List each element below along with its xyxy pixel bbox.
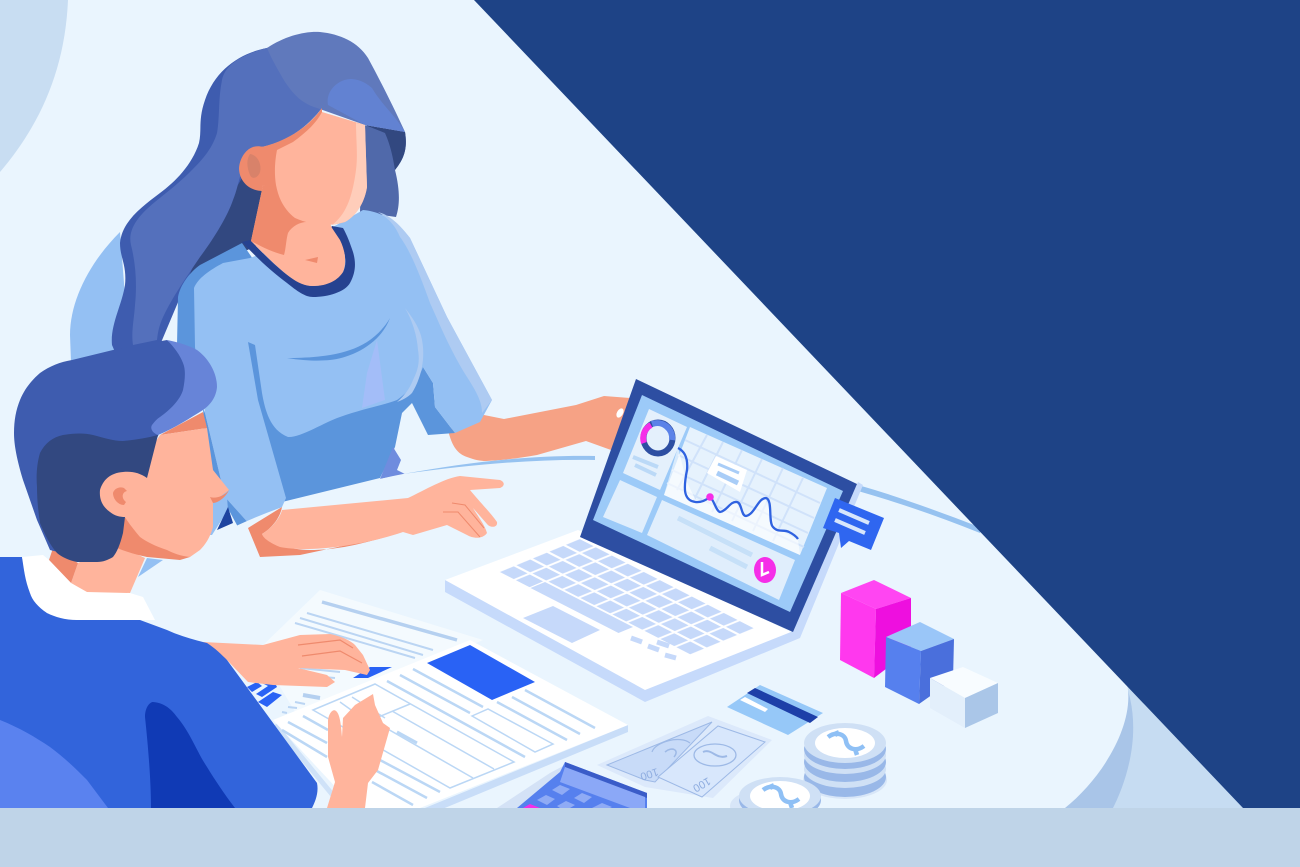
- grid lines: [667, 435, 820, 547]
- screen inner: [593, 395, 843, 612]
- white cube: [930, 667, 998, 728]
- man hair: [14, 340, 195, 562]
- form sheet: [273, 640, 628, 810]
- sweater: [0, 557, 318, 808]
- shoulder highlight: [378, 212, 492, 413]
- neck upper shade: [260, 145, 290, 200]
- man ear: [100, 472, 150, 517]
- right bill: 100: [691, 774, 712, 794]
- screen panes: [603, 409, 827, 600]
- blue highlight block: [427, 645, 535, 700]
- dark diagonal panel: [474, 0, 1300, 808]
- man jaw shade: [117, 517, 190, 560]
- back shoulder: [70, 232, 130, 362]
- man face: [125, 428, 229, 557]
- hair main: [130, 47, 340, 345]
- ear: [239, 146, 263, 191]
- chat bubble: [823, 498, 884, 550]
- form box: [472, 709, 553, 752]
- face highlight: [332, 123, 367, 225]
- woman figure: [70, 32, 630, 577]
- keyboard: [498, 538, 756, 658]
- sleeve dark sliver: [203, 408, 252, 527]
- shirt underside tint: [380, 447, 405, 479]
- man forearm: [203, 634, 370, 687]
- hair behind face: [360, 125, 406, 217]
- woman far arm: [448, 396, 630, 461]
- shirt lower body: [244, 330, 455, 502]
- form lines: [282, 669, 595, 805]
- trackpad: [523, 606, 600, 643]
- shirt main: [194, 210, 492, 527]
- blue cube: [885, 622, 954, 704]
- front coin: [730, 777, 821, 824]
- collarbone mark: [305, 257, 318, 263]
- white chart area: [664, 447, 800, 555]
- screen bezel: [580, 379, 857, 632]
- collar: [22, 555, 155, 620]
- donut chart: [643, 422, 672, 454]
- bottom band: [0, 808, 1300, 867]
- left bill: [607, 722, 712, 782]
- form table: [313, 684, 514, 788]
- shirt fold: [287, 318, 390, 361]
- hair underside: [130, 170, 265, 345]
- under sleeve details: [138, 470, 233, 577]
- calculator: [497, 762, 647, 808]
- man dark hair: [37, 434, 158, 562]
- back paper: [247, 590, 483, 720]
- woman near arm: [248, 476, 504, 557]
- laptop base: [445, 530, 791, 690]
- coin stack: [803, 723, 887, 799]
- laptop: [445, 379, 884, 702]
- man hair tip: [151, 340, 217, 435]
- man lips: [210, 490, 229, 503]
- chest tint: [362, 340, 385, 408]
- neck shade: [251, 185, 307, 255]
- man forehead shade: [160, 412, 207, 435]
- hair fringe: [328, 79, 405, 132]
- man hand on form: [327, 694, 390, 808]
- table top: [0, 457, 1128, 808]
- man figure: [0, 340, 390, 808]
- data card: [707, 456, 747, 492]
- pink cube: [840, 580, 911, 678]
- left bill: 100: [639, 765, 660, 782]
- face: [275, 112, 367, 225]
- shirt side: [177, 243, 255, 360]
- sweater fold: [145, 702, 235, 808]
- hair crown: [267, 32, 405, 132]
- bar cubes: [840, 580, 998, 728]
- neck and chest: [251, 185, 345, 286]
- laptop base edge: [445, 482, 863, 702]
- man neck: [49, 545, 145, 593]
- screen text bars: [633, 457, 752, 567]
- line chart: [678, 448, 798, 539]
- clock badge: [754, 557, 776, 583]
- bust highlight: [397, 308, 423, 402]
- sweater highlight: [0, 720, 108, 808]
- hair outer: [112, 48, 300, 352]
- collar: [242, 226, 355, 297]
- credit card: [727, 685, 823, 735]
- right bill: [658, 726, 765, 797]
- table rim lines: [403, 456, 982, 533]
- face shade: [262, 108, 322, 160]
- man finger lines: [298, 640, 362, 663]
- banknotes: [597, 716, 772, 798]
